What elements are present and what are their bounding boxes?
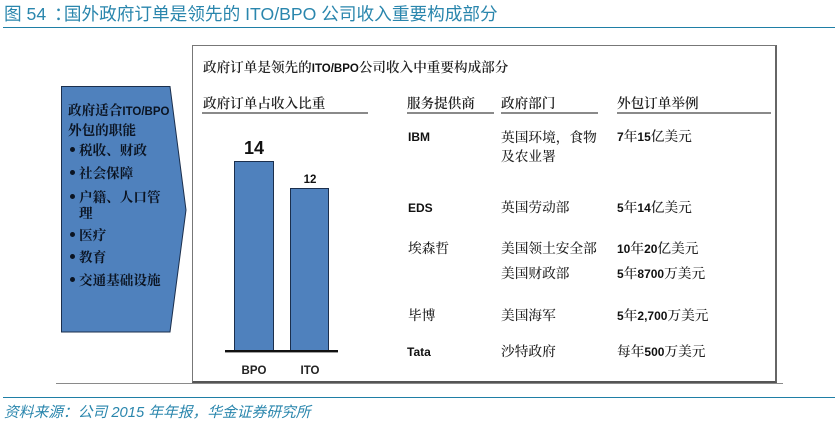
row: EDS: 5年14亿美元 <box>617 196 692 216</box>
row: EDS: EDS <box>408 201 433 215</box>
row: Perot: 毕博 <box>408 304 435 324</box>
row: Accenture: 美国财政部 <box>501 262 569 282</box>
column heading: department: 政府部门 <box>501 92 555 112</box>
bar: BPO: 14 <box>244 138 264 158</box>
row: IBM: 7年15亿美元 <box>617 125 692 145</box>
panel heading: 政府订单是领先的ITO/BPO公司收入中重要构成部分 <box>203 56 508 76</box>
bar: BPO: BPO <box>242 365 267 377</box>
row: IBM: 及农业署 <box>501 145 556 165</box>
source note: 资料来源：公司 2015 年年报，华金证券研究所 <box>4 405 311 421</box>
list item: education: 教育 <box>79 246 106 266</box>
list item: household registration <box>70 186 161 222</box>
heading: government share of revenue: 政府订单占收入比重 <box>203 92 325 112</box>
row: IBM: 英国环境，食物 <box>501 126 597 146</box>
list item: household registration: 户籍、人口管 <box>79 186 161 206</box>
row: Accenture: 美国领土安全部 <box>501 237 597 257</box>
panel underline <box>56 383 783 384</box>
row: Accenture: 5年8700万美元 <box>617 262 705 282</box>
list item: household registration: 理 <box>79 202 93 222</box>
row: IBM <box>408 125 692 165</box>
title: 图 54 ：国外政府订单是领先的 ITO/BPO 公司收入重要构成部分 <box>4 4 498 24</box>
arrow heading <box>68 99 169 139</box>
list item: tax: 税收、财政 <box>79 139 147 159</box>
row: Tata: 沙特政府 <box>501 340 556 360</box>
bar: BPO <box>234 138 274 377</box>
bar: ITO: ITO <box>301 365 320 377</box>
row: Accenture <box>408 237 705 282</box>
panel: government functions arrow <box>61 86 186 332</box>
bar: ITO <box>290 174 328 377</box>
list item: transport infrastructure: 交通基础设施 <box>79 269 161 289</box>
row: EDS <box>408 196 692 216</box>
row: IBM: IBM <box>408 130 430 144</box>
row: Perot <box>408 304 708 324</box>
column heading: contract examples: 外包订单举例 <box>617 92 699 112</box>
panel: main content box <box>192 45 777 383</box>
column heading: provider: 服务提供商 <box>407 92 475 112</box>
arrow heading: 外包的职能 <box>68 119 136 139</box>
row: Perot: 美国海军 <box>501 304 556 324</box>
bar: ITO: 12 <box>304 174 316 186</box>
list item: medical: 医疗 <box>79 224 106 244</box>
footer rule <box>3 397 835 398</box>
arrow heading: 政府适合ITO/BPO <box>68 99 169 119</box>
row: Perot: 5年2,700万美元 <box>617 304 708 324</box>
row: Tata: Tata <box>407 345 431 359</box>
title rule <box>3 27 835 28</box>
row: EDS: 英国劳动部 <box>501 196 569 216</box>
bar chart <box>225 138 338 377</box>
row: Tata <box>407 340 706 360</box>
list item: social security: 社会保障 <box>79 162 133 182</box>
row: Accenture: 埃森哲 <box>408 237 449 257</box>
row: Tata: 每年500万美元 <box>617 340 706 360</box>
row: Accenture: 10年20亿美元 <box>617 237 698 257</box>
